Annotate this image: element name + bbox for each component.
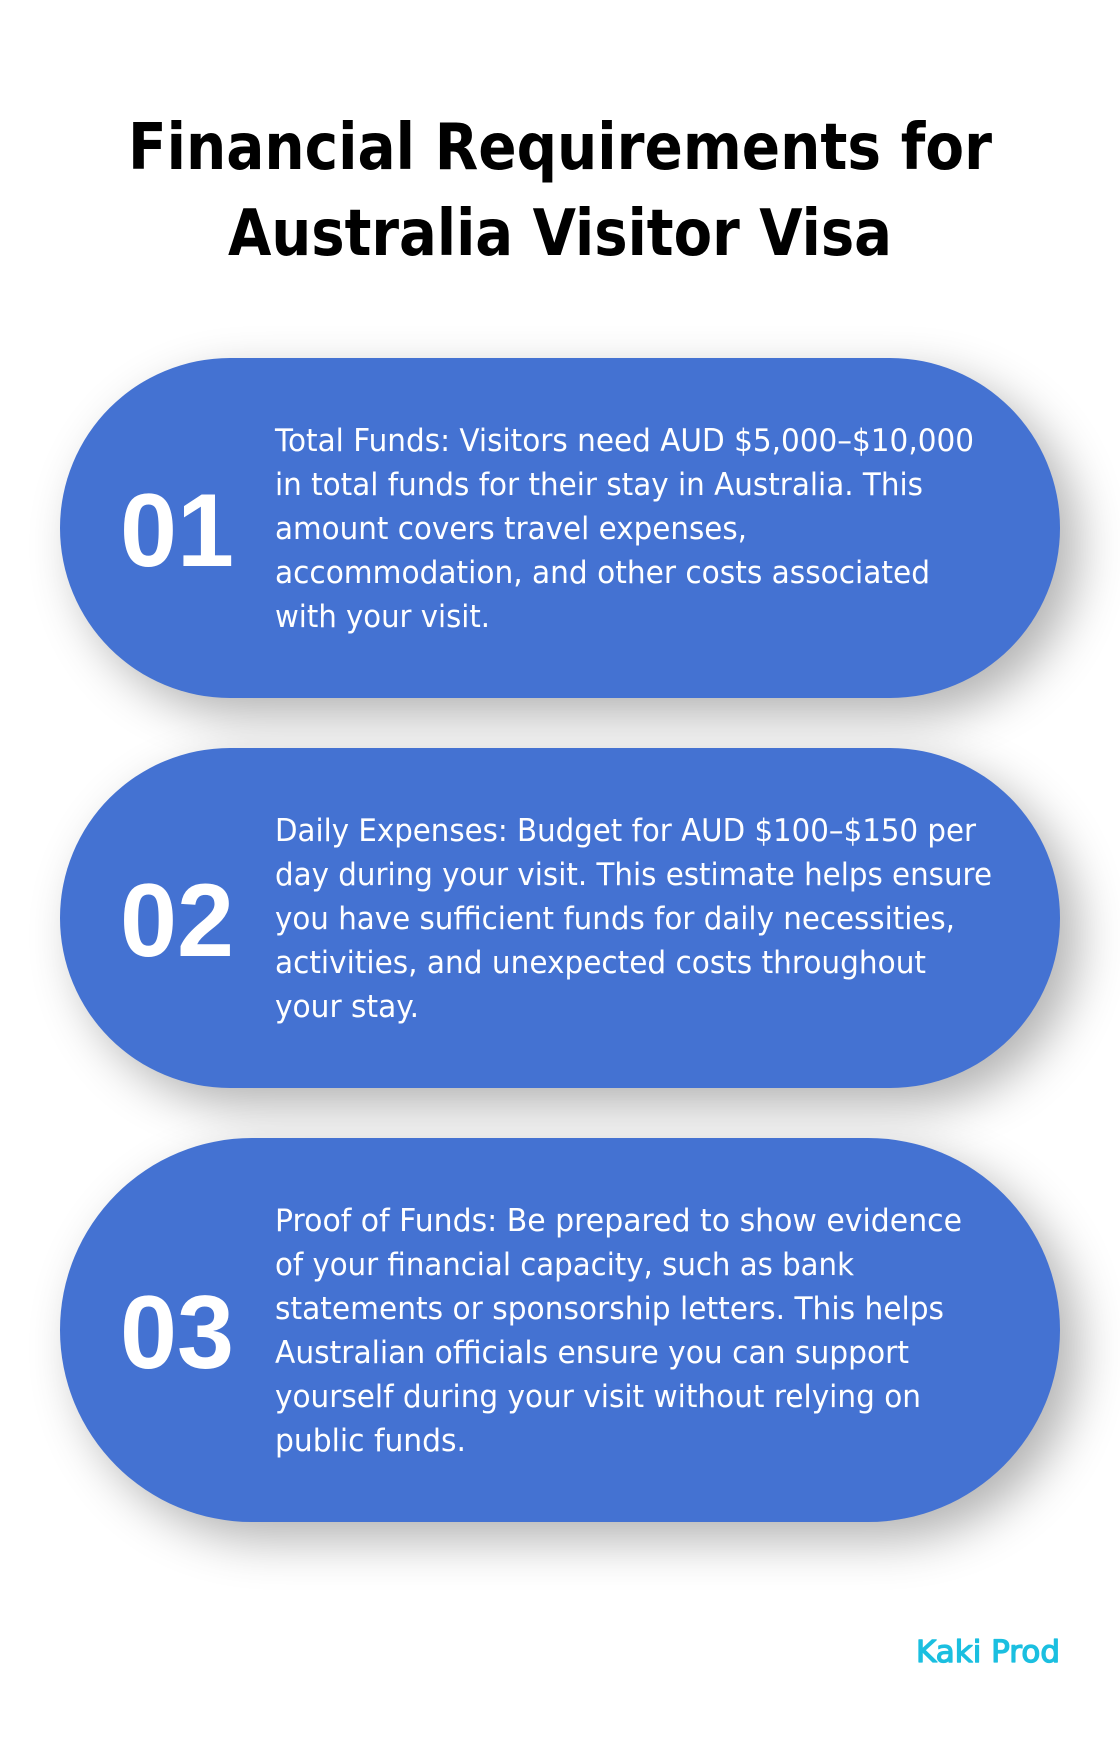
text: daily expenses: you have sufficient funds for daily necessities, [275,901,955,937]
title [128,111,992,271]
title: Financial Requirements for [128,111,992,185]
text: total funds [274,423,974,635]
text: daily expenses: Daily Expenses: Budget for AUD $100–$150 per [275,813,976,849]
text: total funds: in total funds for their stay in Australia. This [275,467,923,503]
text: total funds: amount covers travel expenses, [275,511,747,547]
step number 01: 01 [120,473,234,589]
text: proof of funds: statements or sponsorship letters. This helps [275,1291,944,1327]
text: proof of funds: public funds. [275,1423,466,1459]
text: proof of funds: Australian officials ensure you can support [275,1335,909,1371]
text: total funds: Total Funds: Visitors need AUD $5,000–$10,000 [274,423,974,459]
text: daily expenses: your stay. [275,989,419,1025]
text: proof of funds: yourself during your visit without relying on [275,1379,921,1415]
text: daily expenses [275,813,992,1025]
text: proof of funds: Proof of Funds: Be prepared to show evidence [275,1203,962,1239]
text: daily expenses: day during your visit. This estimate helps ensure [275,857,992,893]
panel: proof of funds [60,1138,1060,1522]
panel: daily expenses [60,748,1060,1088]
text: total funds: with your visit. [275,599,490,635]
text: total funds: accommodation, and other costs associated [275,555,930,591]
text: proof of funds: of your financial capacity, such as bank [275,1247,854,1283]
title: Australia Visitor Visa [228,197,892,271]
step number 02: 02 [120,863,234,979]
panel: total funds [60,358,1060,698]
text: daily expenses: activities, and unexpected costs throughout [275,945,926,981]
step number 03: 03 [120,1275,234,1391]
logo: Kaki Prod: Kaki Prod [916,1635,1060,1670]
text: proof of funds [275,1203,962,1459]
